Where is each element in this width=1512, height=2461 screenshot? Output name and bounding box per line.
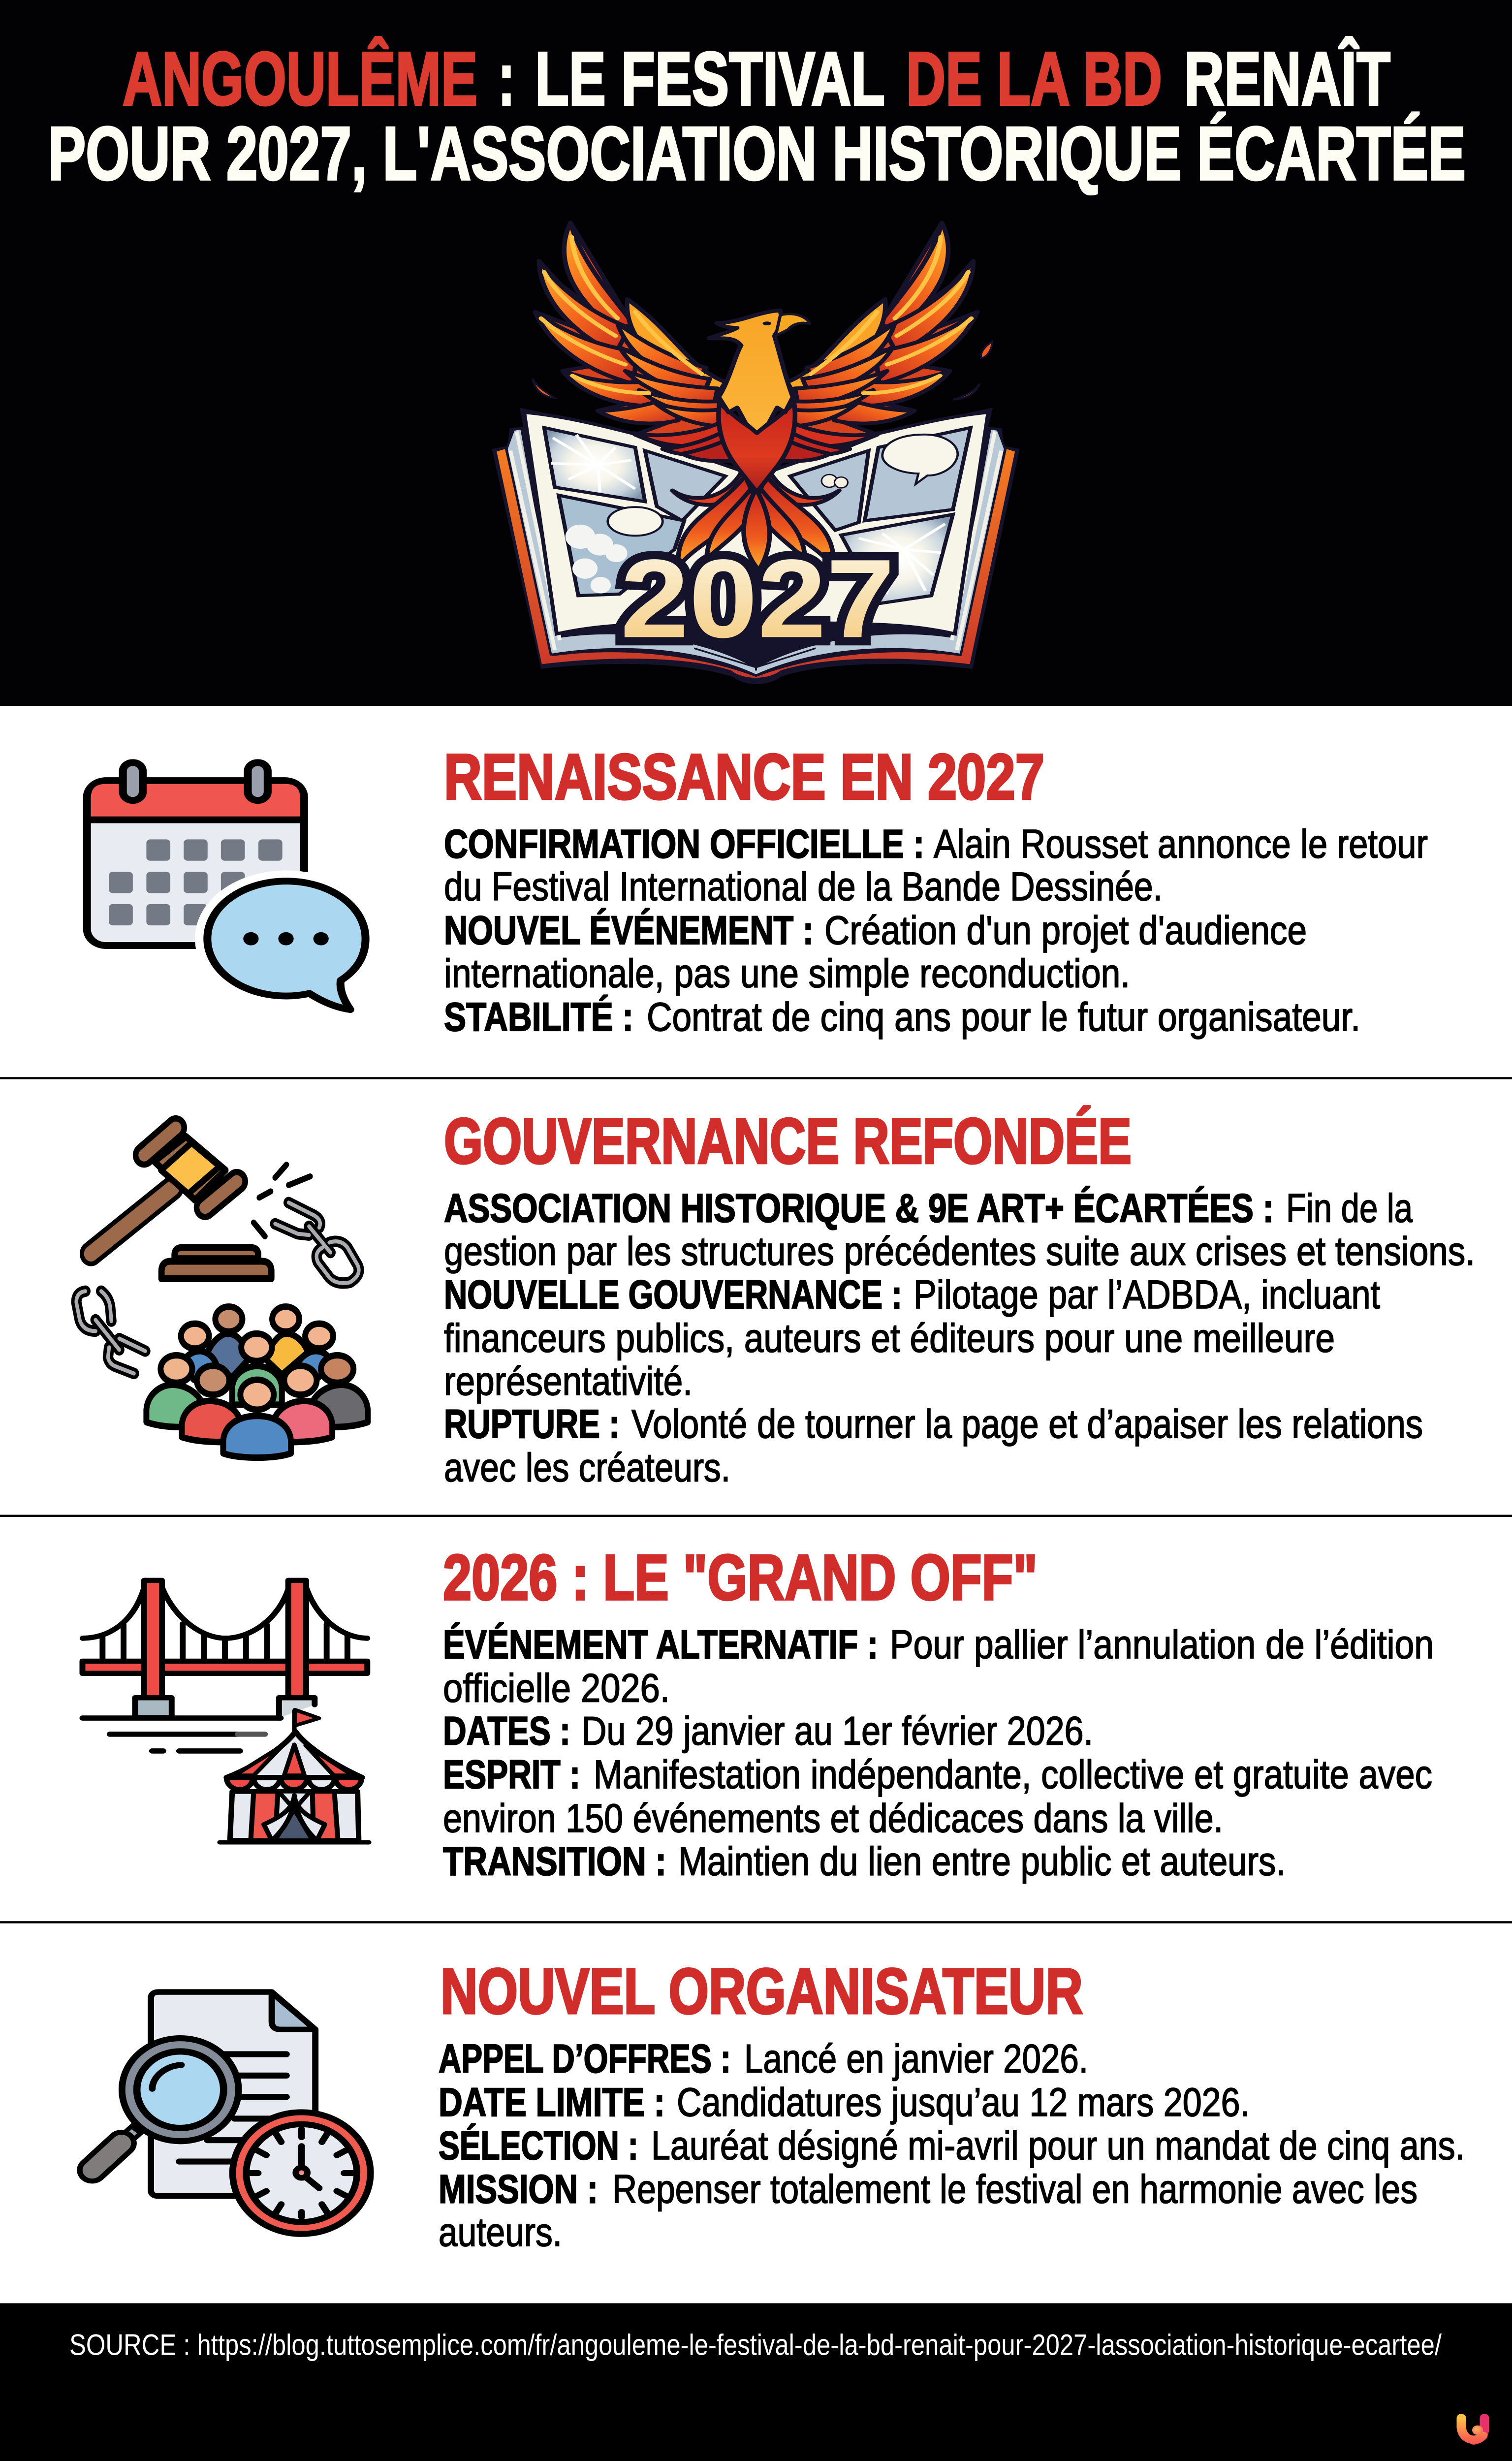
- icon: calendar and speech bubble: [87, 762, 366, 1010]
- sparks: [253, 1165, 310, 1236]
- circus tent: [220, 1710, 369, 1842]
- crowd: [146, 1307, 368, 1457]
- icon: brand logo: [1461, 2418, 1484, 2440]
- text block: SÉLECTION :: [439, 2123, 638, 2168]
- text block: RUPTURE :: [444, 1402, 620, 1447]
- title: LE FESTIVAL: [535, 36, 885, 121]
- text block: auteurs.: [439, 2210, 562, 2255]
- left wing: [535, 222, 735, 462]
- clock: [233, 2112, 371, 2234]
- suspension bridge: [82, 1580, 367, 1751]
- magnifying glass: [92, 2038, 239, 2170]
- text block: [443, 1622, 1434, 1884]
- icon: bridge and circus tent: [82, 1580, 369, 1842]
- text block: ESPRIT :: [443, 1752, 580, 1797]
- gavel: [91, 1128, 271, 1279]
- text block: Création d'un projet d'audience: [824, 908, 1307, 953]
- panel: 2026 le grand off: [82, 1542, 1434, 1884]
- tail feathers: [672, 473, 839, 570]
- broken chains: [76, 1202, 359, 1374]
- text block: ÉVÉNEMENT ALTERNATIF :: [443, 1622, 878, 1667]
- title: RENAÎT: [1184, 36, 1390, 121]
- phoenix: [533, 222, 992, 570]
- panel: nouvel organisateur: [92, 1955, 1465, 2255]
- heading: 2026 : LE "GRAND OFF": [443, 1542, 1038, 1613]
- text block: DATES :: [443, 1709, 570, 1753]
- icon: gavel, broken chains and crowd: [76, 1128, 368, 1457]
- chest and body: [719, 403, 795, 492]
- beak: [776, 314, 810, 336]
- document: [151, 1992, 315, 2196]
- title: DE LA BD: [906, 36, 1162, 121]
- text block: Fin de la: [1286, 1186, 1413, 1230]
- text block: APPEL D’OFFRES :: [439, 2037, 731, 2081]
- text block: [444, 821, 1428, 1040]
- panel: gouvernance refondée: [76, 1105, 1475, 1490]
- title: :: [498, 36, 515, 121]
- text block: Candidatures jusqu’au 12 mars 2026.: [677, 2080, 1250, 2125]
- illustration: phoenix rising from comic book, 2027: [492, 222, 1020, 684]
- text block: [439, 2037, 1465, 2255]
- heading: GOUVERNANCE REFONDÉE: [444, 1105, 1132, 1177]
- text block: DATE LIMITE :: [439, 2080, 665, 2125]
- year 2027: 2027: [620, 536, 895, 661]
- heading: RENAISSANCE EN 2027: [444, 741, 1044, 813]
- text block: du Festival International de la Bande Dessinée.: [444, 864, 1163, 909]
- text block: Du 29 janvier au 1er février 2026.: [582, 1709, 1093, 1753]
- text block: internationale, pas une simple reconduction.: [444, 951, 1130, 996]
- text block: STABILITÉ :: [444, 995, 633, 1040]
- text block: MISSION :: [439, 2167, 598, 2211]
- text block: NOUVELLE GOUVERNANCE :: [444, 1272, 902, 1317]
- text block: Maintien du lien entre public et auteurs.: [678, 1839, 1286, 1884]
- text block: TRANSITION :: [443, 1839, 666, 1884]
- text block: [444, 1186, 1475, 1490]
- panel: renaissance en 2027: [87, 741, 1428, 1040]
- open comic book: [492, 408, 1020, 684]
- embers: [533, 342, 992, 400]
- panel: header: [0, 0, 1512, 706]
- text block: Pilotage par l’ADBDA, incluant: [914, 1272, 1380, 1317]
- icon: document, magnifier and clock: [92, 1992, 371, 2234]
- eye: [763, 321, 771, 325]
- text block: CONFIRMATION OFFICIELLE :: [444, 821, 924, 866]
- text block: avec les créateurs.: [444, 1446, 730, 1490]
- text block: représentativité.: [444, 1359, 693, 1404]
- heading: NOUVEL ORGANISATEUR: [441, 1955, 1083, 2027]
- title: ANGOULÊME: [123, 36, 477, 121]
- text block: Lancé en janvier 2026.: [744, 2037, 1088, 2081]
- text block: environ 150 événements et dédicaces dans la ville.: [443, 1796, 1223, 1841]
- panel: footer: [0, 2303, 1512, 2461]
- title: [48, 36, 1466, 195]
- text block: NOUVEL ÉVÉNEMENT :: [444, 908, 814, 953]
- text block: officielle 2026.: [443, 1666, 670, 1710]
- head and neck: [709, 311, 793, 433]
